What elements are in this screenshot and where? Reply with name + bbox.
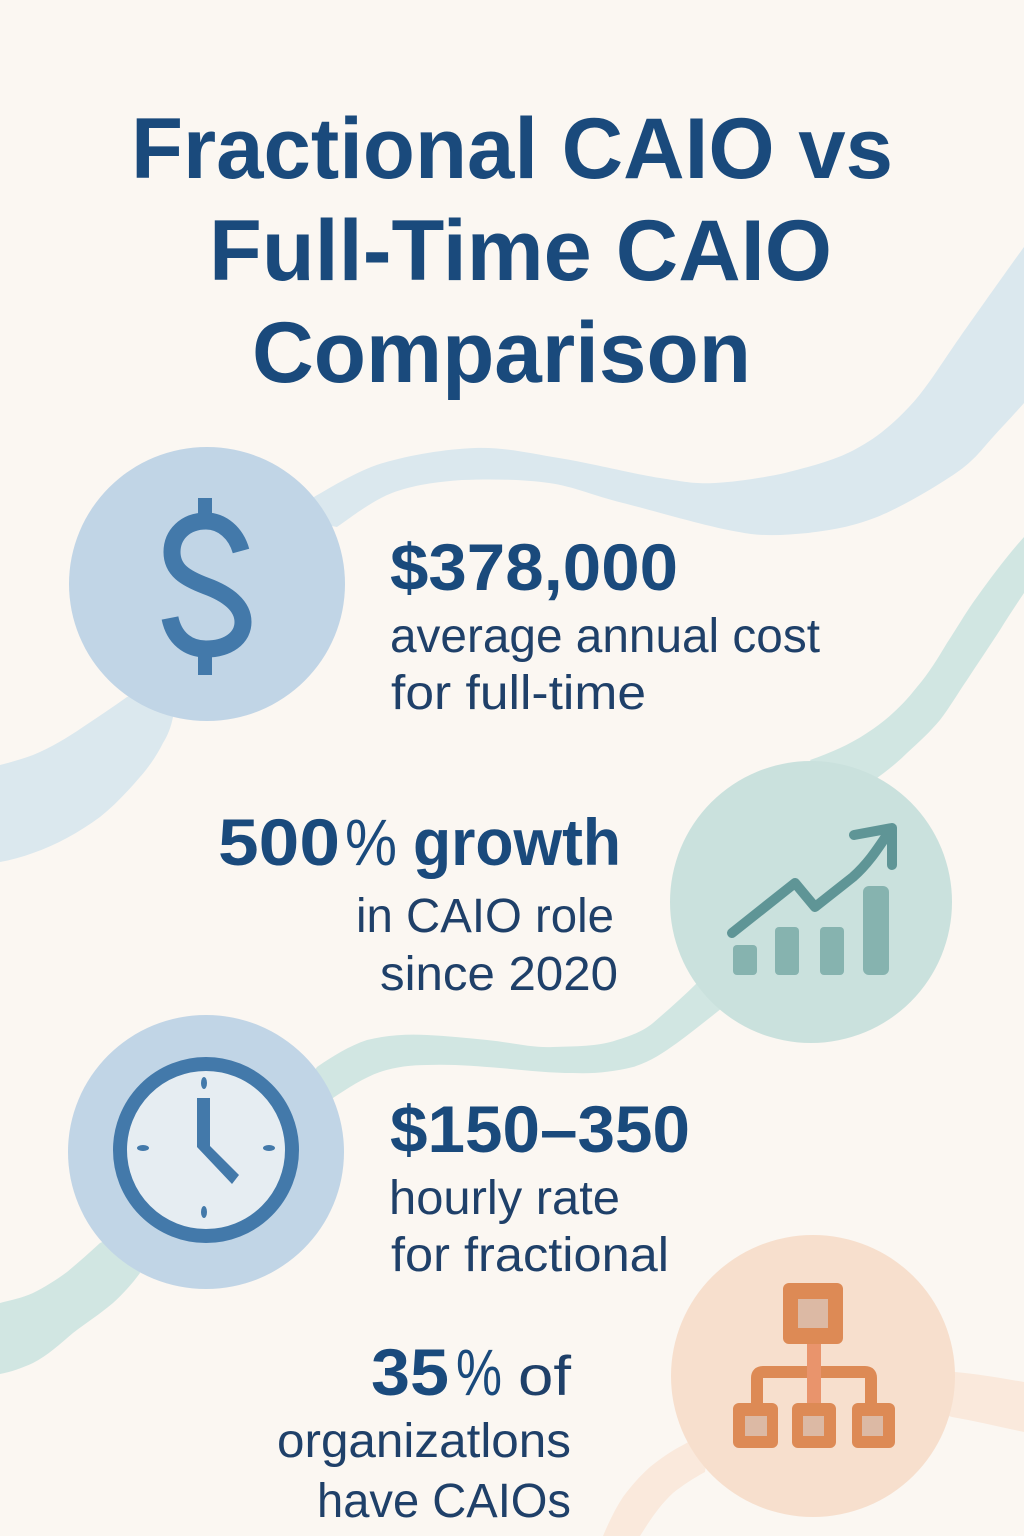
- ribbon: teal wave middle: [300, 983, 730, 1098]
- stat: average annual cost: [390, 530, 820, 720]
- icon: org chart in peach circle: [671, 1235, 955, 1517]
- stat: organizations with CAIOs: [277, 1335, 572, 1528]
- stat: fractional hourly rate: [389, 1092, 690, 1282]
- icon: clock in blue circle: [68, 1015, 344, 1289]
- stat: CAIO role growth: since 2020: [380, 948, 618, 1001]
- stat: CAIO role growth: in CAIO role: [356, 890, 614, 943]
- stat: average annual cost: for full-time: [391, 667, 646, 720]
- stat: average annual cost: average annual cost: [390, 610, 820, 663]
- ribbon: blue wave left: [0, 690, 173, 862]
- stat: organizations with CAIOs: of: [518, 1344, 572, 1407]
- stat: organizations with CAIOs: %: [456, 1335, 502, 1409]
- stat: CAIO role growth: [218, 805, 621, 1001]
- ribbon: peach wave bottom: [603, 1430, 710, 1536]
- stat: fractional hourly rate: $150–350: [390, 1092, 690, 1166]
- title: Fractional CAIO vs: [131, 101, 893, 197]
- ribbon: blue wave upper right: [300, 247, 1024, 535]
- stat: organizations with CAIOs: organizatlons: [277, 1415, 571, 1468]
- icon: dollar sign in blue circle: [69, 447, 345, 721]
- ribbon: teal wave left: [0, 1230, 140, 1374]
- title: [131, 101, 893, 401]
- stat: CAIO role growth: growth: [413, 805, 621, 879]
- ribbon: peach wave right: [930, 1370, 1024, 1432]
- icon: growth chart in green circle: [670, 761, 952, 1043]
- stat: average annual cost: $378,000: [390, 530, 678, 604]
- ribbon: teal wave right: [810, 537, 1024, 790]
- stat: fractional hourly rate: for fractional: [391, 1229, 669, 1282]
- title: Comparison: [252, 305, 751, 401]
- stat: CAIO role growth: %: [345, 805, 397, 879]
- stat: organizations with CAIOs: have CAIOs: [317, 1475, 571, 1528]
- stat: organizations with CAIOs: 35: [371, 1335, 449, 1409]
- stat: CAIO role growth: 500: [218, 805, 340, 879]
- stat: fractional hourly rate: hourly rate: [389, 1172, 620, 1225]
- title: Full-Time CAIO: [209, 203, 832, 299]
